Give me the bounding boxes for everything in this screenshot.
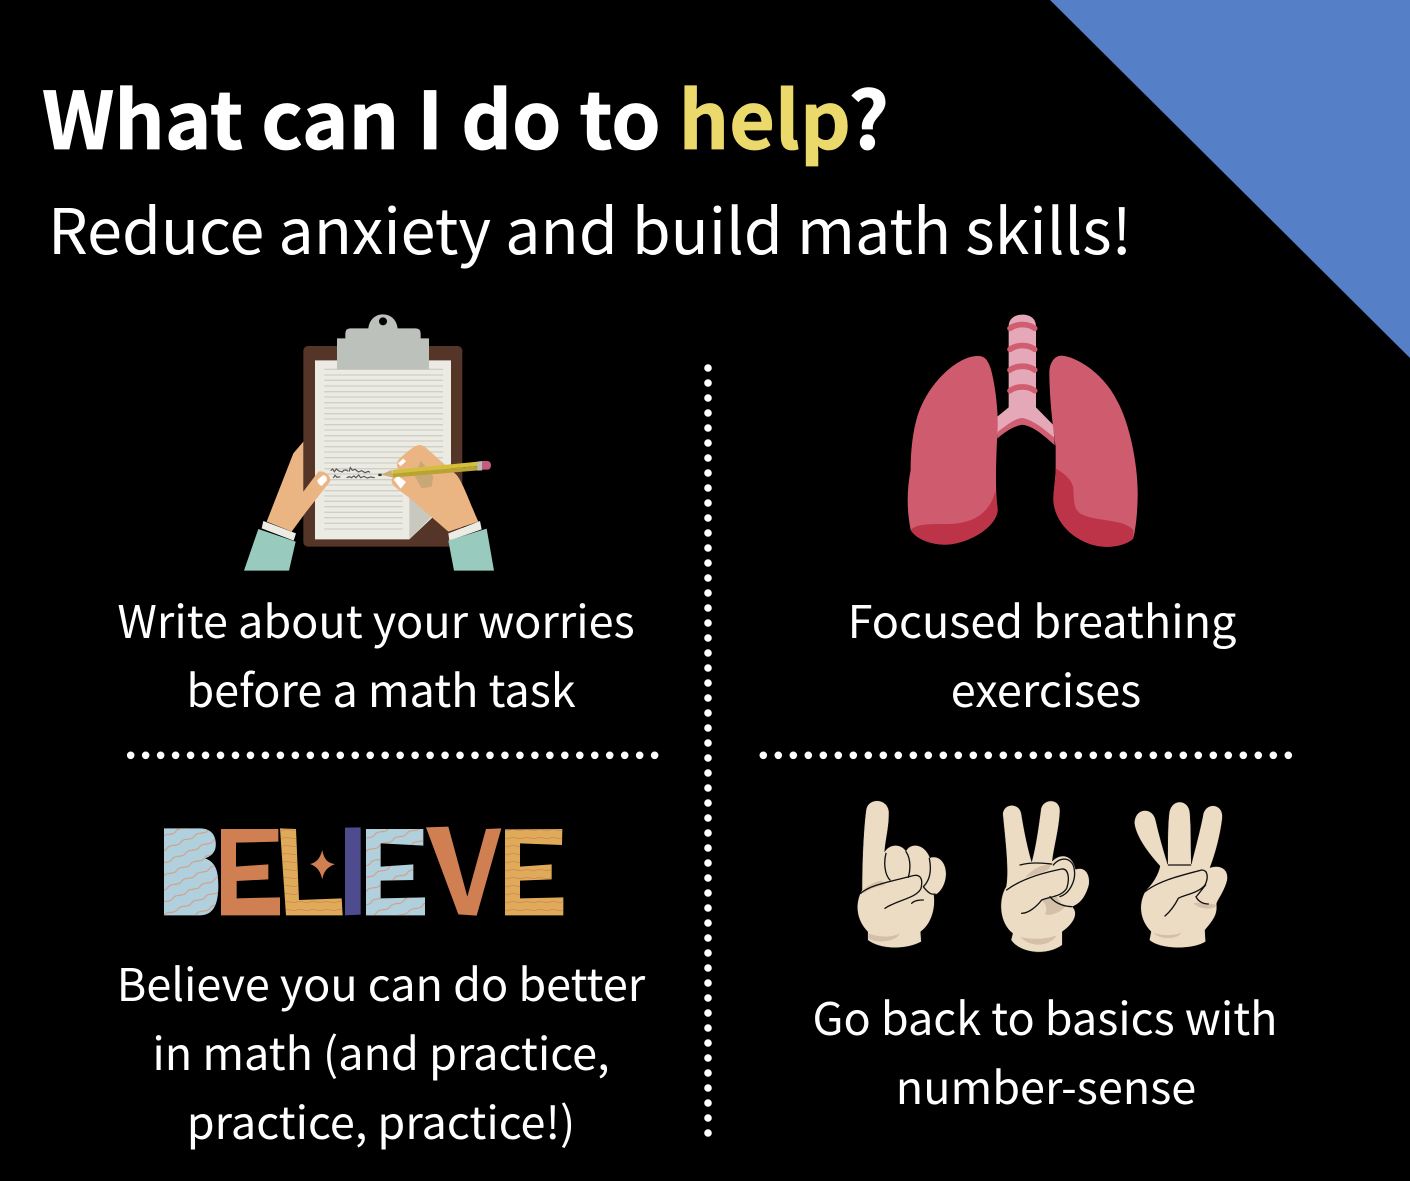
hand: one finger [857,801,946,948]
corner triangle [1050,0,1410,358]
hand: three fingers [1134,802,1228,948]
icon: lungs [908,315,1138,547]
icon: clipboard and writing hands [244,314,494,571]
text: believe line 2: in math (and practice, [152,1018,610,1083]
panel: number sense [812,801,1278,1117]
text: go back to basics: Go back to basics with [812,983,1278,1048]
panel: write about worries [117,314,635,720]
text: number-sense: number-sense [896,1052,1196,1117]
text: exercises: exercises [951,655,1141,720]
text: believe line 1: Believe you can do better [117,949,646,1014]
hand: two fingers [1001,801,1089,952]
icon: believe lettering [164,827,563,916]
icon: counting hands [857,801,1228,952]
text: believe line 3: practice, practice!) [187,1087,575,1152]
title: What can I do to help? [42,57,889,172]
subtitle: Reduce anxiety and build math skills! [48,182,1132,273]
panel: focused breathing [848,315,1236,720]
dotted dividers [131,368,1294,1140]
text: focused breathing: Focused breathing [848,586,1236,651]
text: write about worries: Write about your worries [117,586,635,651]
text: before a math task: before a math task [186,655,576,720]
panel: believe [117,827,646,1152]
